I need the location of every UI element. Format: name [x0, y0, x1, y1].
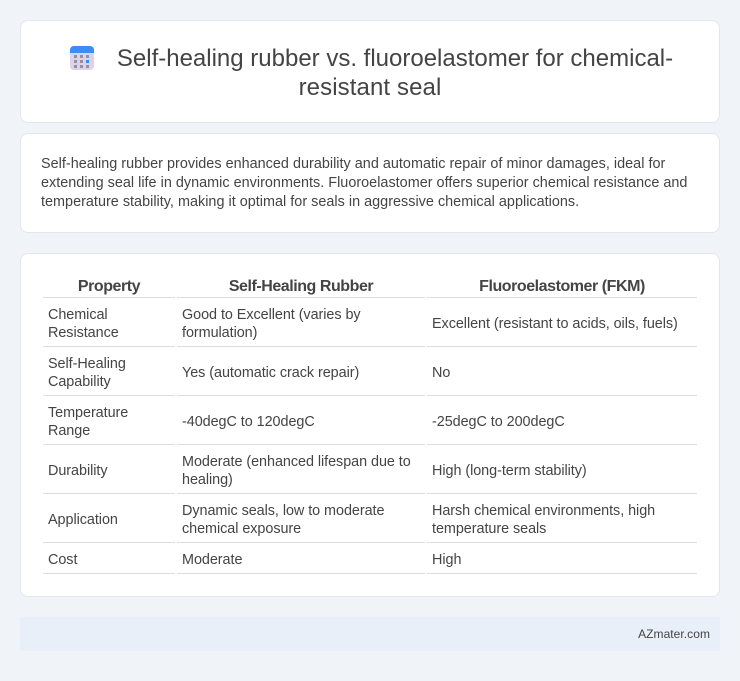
comparison table: [43, 278, 697, 574]
row: self-healing capability: Yes (automatic crack repair): [182, 365, 359, 381]
title: Self-healing rubber vs. fluoroelastomer for chemical-: [117, 45, 673, 72]
row: application: Dynamic seals, low to moderate: [182, 503, 384, 519]
row: chemical resistance: Good to Excellent (varies by: [182, 307, 361, 323]
row: application: temperature seals: [432, 521, 546, 537]
row: temperature range: -25degC to 200degC: [432, 414, 565, 430]
footer bar: [20, 617, 720, 651]
row: application: Application: [48, 512, 118, 528]
row: chemical resistance: Chemical: [48, 307, 108, 323]
title: resistant seal: [299, 74, 441, 101]
panel: title card: [20, 20, 720, 123]
row: durability: Moderate (enhanced lifespan due to: [182, 454, 411, 470]
row: cost: Moderate: [182, 552, 242, 568]
row: durability: Durability: [48, 463, 107, 479]
footer credit: AZmater.com: [638, 627, 710, 641]
row: durability: healing): [182, 472, 233, 488]
row: temperature range: -40degC to 120degC: [182, 414, 315, 430]
icon: calendar: [70, 46, 94, 70]
row: chemical resistance: Resistance: [48, 325, 119, 341]
title: [117, 45, 673, 101]
header: Fluoroelastomer (FKM): Fluoroelastomer (FKM): [479, 278, 645, 295]
row: chemical resistance: Excellent (resistant to acids, oils, fuels): [432, 316, 678, 332]
row: temperature range: Temperature: [48, 405, 128, 421]
row: application: Harsh chemical environments, high: [432, 503, 655, 519]
row: durability: [48, 454, 587, 488]
row: cost: Cost: [48, 552, 77, 568]
summary paragraph: temperature stability, making it optimal for seals in aggressive chemical applications.: [41, 194, 579, 210]
row: chemical resistance: [48, 307, 678, 341]
row: application: [48, 503, 655, 537]
row: chemical resistance: formulation): [182, 325, 257, 341]
row: temperature range: [48, 405, 565, 439]
row: durability: High (long-term stability): [432, 463, 587, 479]
panel: comparison table: [20, 253, 720, 597]
row: self-healing capability: Self-Healing: [48, 356, 126, 372]
panel: summary text: [20, 133, 720, 233]
row: cost: High: [432, 552, 461, 568]
row: temperature range: Range: [48, 423, 90, 439]
summary paragraph: Self-healing rubber provides enhanced durability and automatic repair of minor damages, ideal for: [41, 156, 665, 172]
header: Property: Property: [78, 278, 140, 295]
row: self-healing capability: [48, 356, 450, 390]
summary paragraph: extending seal life in dynamic environments. Fluoroelastomer offers superior chemical resistance and: [41, 175, 687, 191]
header: Self-Healing Rubber: Self-Healing Rubber: [229, 278, 373, 295]
row: cost: [48, 552, 461, 568]
row: self-healing capability: Capability: [48, 374, 111, 390]
row: self-healing capability: No: [432, 365, 450, 381]
summary paragraph: [41, 156, 687, 210]
row: application: chemical exposure: [182, 521, 301, 537]
